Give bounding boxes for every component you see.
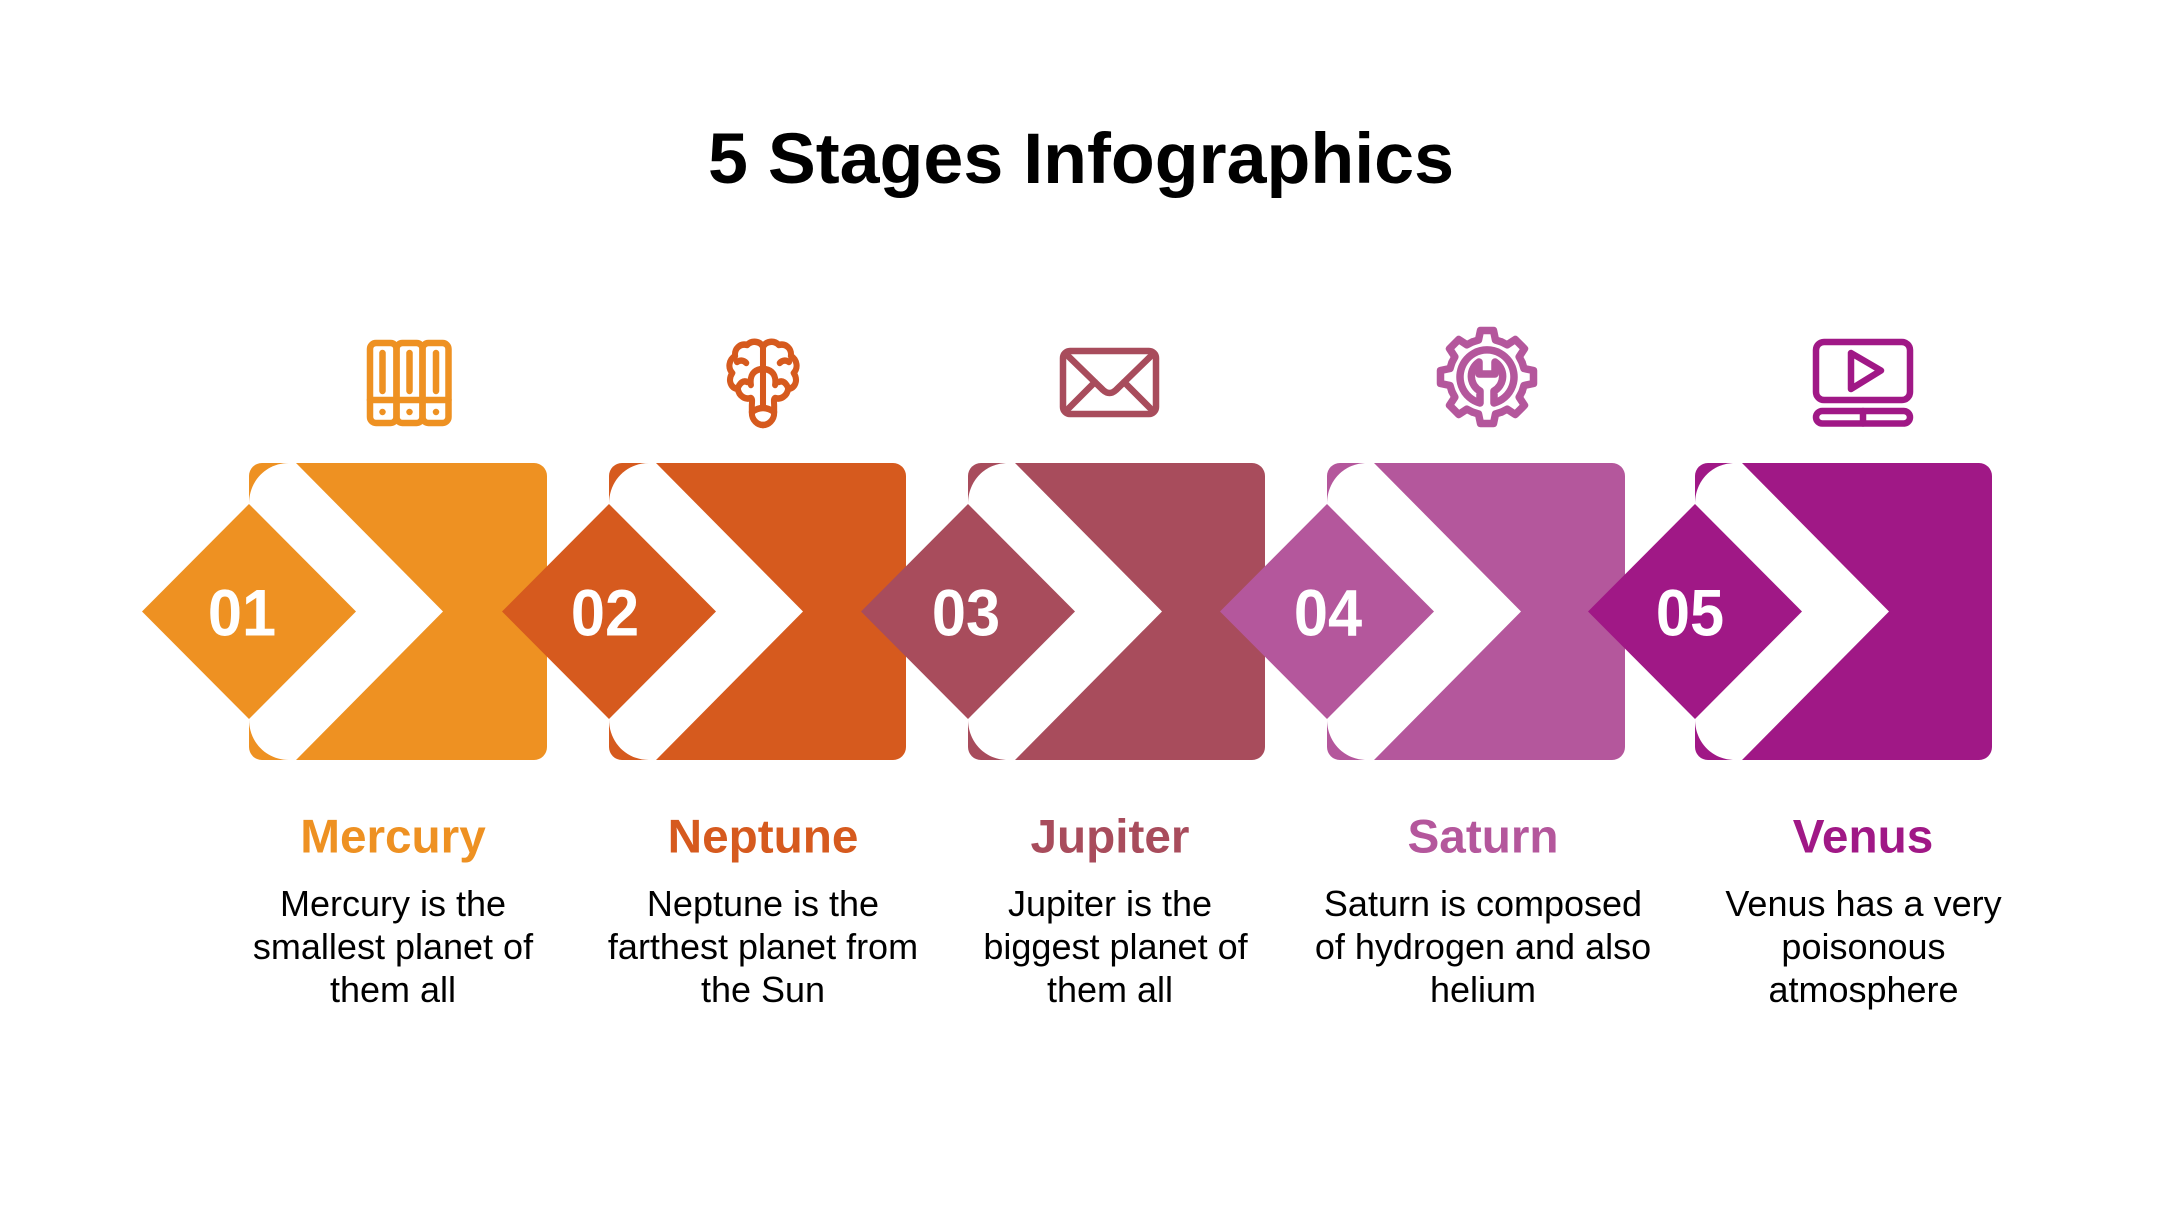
stage 5 description: atmosphere: [1768, 969, 1959, 1010]
stage 3 square: [968, 463, 1265, 760]
icon: envelope: [1063, 351, 1156, 414]
icon: gear with wrench: [1440, 330, 1534, 424]
stage 5 number diamond: [1588, 504, 1802, 719]
title: 5 Stages Infographics: [708, 119, 1454, 199]
panel: stage 3 Jupiter: [861, 351, 1265, 1010]
stage 2 white chevron: [609, 463, 803, 760]
stage 5 description: poisonous: [1781, 926, 1946, 967]
stage 4 description: helium: [1430, 969, 1536, 1010]
icon: binders: [370, 343, 448, 423]
stage 4 name: Saturn: [1407, 810, 1559, 864]
panel: stage 4 Saturn: [1220, 330, 1651, 1010]
stage 3 name: Jupiter: [1030, 810, 1190, 864]
stage 1 description: them all: [330, 969, 456, 1010]
stage 1 number: 01: [208, 575, 276, 650]
stage 4 number diamond: [1220, 504, 1434, 719]
stage 5 number: 05: [1656, 575, 1724, 650]
stage 2 number diamond: [502, 504, 716, 719]
stage 3 number: 03: [932, 575, 1000, 650]
stage 3 description: biggest planet of: [983, 926, 1249, 967]
stage 4 white chevron: [1327, 463, 1521, 760]
stage 4 description: of hydrogen and also: [1315, 926, 1651, 967]
stage 1 number diamond: [142, 504, 356, 719]
stage 2 square: [609, 463, 906, 760]
stage 2 description: Neptune is the: [647, 883, 879, 924]
stage 1 square: [249, 463, 547, 760]
icon: brain bulb: [729, 342, 797, 425]
stage 1 description: Mercury is the: [280, 883, 506, 924]
panel: stage 1 Mercury: [142, 343, 547, 1010]
stage 4 square: [1327, 463, 1625, 760]
stage 3 number diamond: [861, 504, 1075, 719]
stage 2 name: Neptune: [668, 810, 858, 864]
stage 4 description: Saturn is composed: [1324, 883, 1642, 924]
panel: stage 2 Neptune: [502, 342, 918, 1010]
stage 4 number: 04: [1294, 575, 1363, 650]
stage 1 name: Mercury: [300, 810, 486, 864]
panel: stage 5 Venus: [1588, 342, 2002, 1010]
stage 1 white chevron: [249, 463, 443, 760]
stage 1 description: smallest planet of: [253, 926, 534, 967]
stage 2 description: farthest planet from: [608, 926, 918, 967]
stage 5 description: Venus has a very: [1725, 883, 2002, 924]
stage 2 description: the Sun: [701, 969, 825, 1010]
stage 5 name: Venus: [1793, 810, 1933, 864]
stage 3 description: Jupiter is the: [1008, 883, 1212, 924]
icon: video monitor: [1816, 342, 1910, 424]
stage 2 number: 02: [571, 575, 639, 650]
stage 3 white chevron: [968, 463, 1162, 760]
stage 5 square: [1695, 463, 1992, 760]
stage 5 white chevron: [1695, 463, 1889, 760]
stage 3 description: them all: [1047, 969, 1173, 1010]
